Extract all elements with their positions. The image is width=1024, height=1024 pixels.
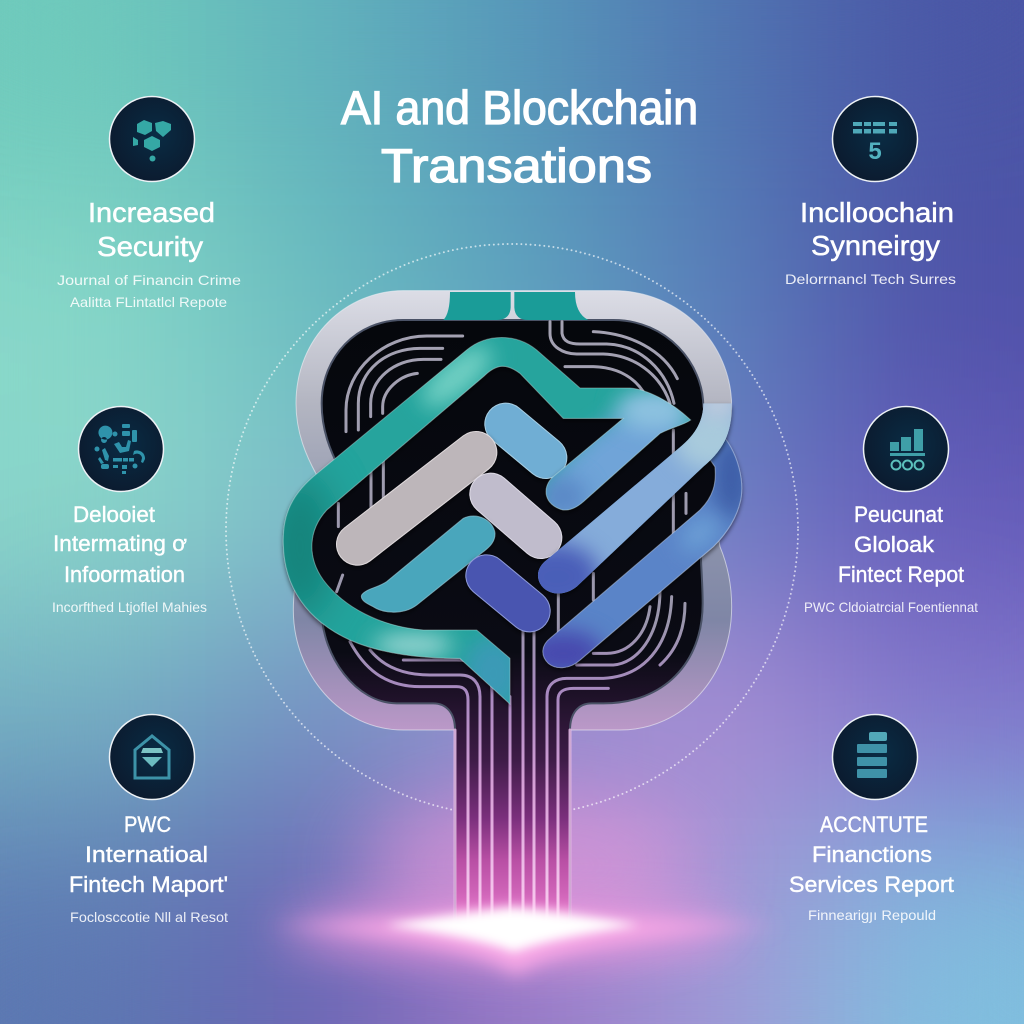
circuit lines xyxy=(337,322,686,923)
main ribbon: teal to blue arrow xyxy=(280,337,692,708)
icon: bars and circles xyxy=(864,406,948,492)
heading xyxy=(789,812,954,897)
heading: Intermating ơ xyxy=(53,531,187,556)
panel: middle right xyxy=(804,406,978,615)
heading: Fintect Repot xyxy=(838,562,964,587)
heading: Internatioal xyxy=(85,842,208,867)
source text: Incorfthed Ltjoflel Mahies xyxy=(52,599,207,615)
heading: Fintech Maport' xyxy=(69,872,228,897)
pink halo at base xyxy=(282,795,742,956)
title: AI and Blockchain xyxy=(341,81,698,134)
dotted orbit circle xyxy=(226,244,798,816)
heading: Increased xyxy=(88,197,215,228)
icon: house with arrow xyxy=(110,714,194,800)
pill: lavender xyxy=(491,494,541,538)
title: Transations xyxy=(381,139,652,192)
pill: light blue xyxy=(506,424,546,458)
heading: Services Report xyxy=(789,872,954,897)
panel: middle left xyxy=(52,406,207,615)
heading: Inclloochain xyxy=(800,197,954,228)
heading: Infoormation xyxy=(64,562,185,587)
heading xyxy=(838,502,964,587)
back ribbon: deep blue xyxy=(542,438,745,670)
source text: Aalitta FLintatlcl Repote xyxy=(70,294,227,310)
heading: Gloloak xyxy=(854,532,935,557)
heading: ACCNTUTE xyxy=(820,812,928,837)
pill: beige xyxy=(357,452,476,544)
panel: bottom right xyxy=(789,714,954,923)
source text xyxy=(57,272,241,310)
heading xyxy=(69,812,228,897)
heading: Synneirgy xyxy=(811,230,940,261)
heading: PWC xyxy=(124,812,171,837)
source text: Delorrnancl Tech Surres xyxy=(785,271,956,287)
pill: indigo xyxy=(487,576,529,611)
leaf: teal xyxy=(361,516,495,612)
middle ribbon: light blue xyxy=(538,402,734,599)
source text: PWC Cldoiatrcial Foentiennat xyxy=(804,599,978,615)
panel: bottom left xyxy=(69,714,228,925)
icon: stacked bars xyxy=(832,714,918,800)
central emblem xyxy=(267,291,752,923)
icon: security hexagons xyxy=(110,96,194,182)
heading: Financtions xyxy=(812,842,932,867)
heading xyxy=(53,502,187,587)
emblem dark core and stem xyxy=(303,320,718,923)
icon: block rows and number: 5 xyxy=(868,138,882,165)
panel: top left xyxy=(57,96,241,310)
heading: Security xyxy=(97,231,203,262)
icon: scattered data fragments xyxy=(78,406,164,492)
light source core xyxy=(270,908,780,975)
panel: top right xyxy=(785,96,956,287)
teal top caps xyxy=(443,292,588,320)
title xyxy=(341,81,698,192)
heading: Delooiet xyxy=(73,502,155,527)
icon: block rows and number xyxy=(832,96,918,182)
source text: Journal of Financin Crime xyxy=(57,272,241,288)
emblem metal frame xyxy=(293,291,732,740)
heading: Peucunat xyxy=(854,502,943,527)
heading xyxy=(800,197,954,261)
source text: Foclosccotie Nll al Resot xyxy=(70,909,228,925)
source text: Finnearigյı Repould xyxy=(808,907,936,923)
heading xyxy=(88,197,215,262)
